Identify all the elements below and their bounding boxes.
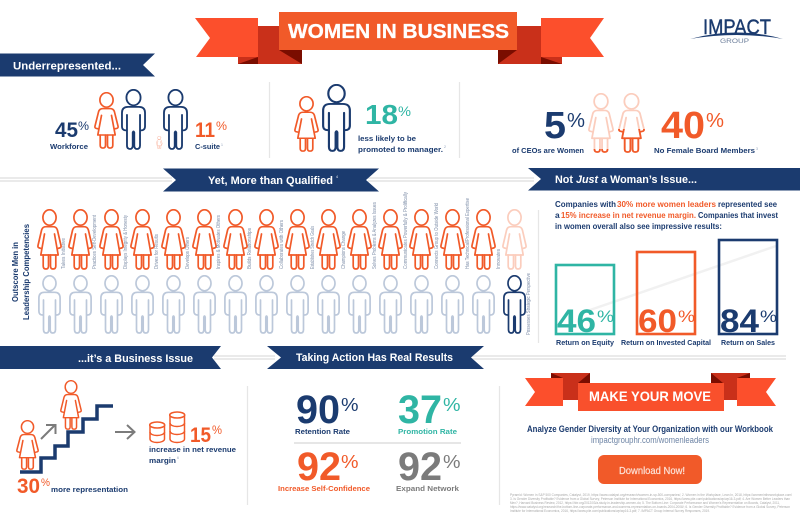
stat: 18% less likely promoted: promoted to manager. [358,145,443,154]
stat: 15% increase in net revenue margin: 15 [190,424,211,447]
text block: companies with more women leaders: 30% more women leaders [617,199,716,209]
banner: it's a Business Issue [0,346,221,369]
icon: woman and man, promotion [295,85,350,151]
competency labels: Communicates Powerfully & Prolifically [403,192,409,269]
chart: stairs with women climbing [17,381,113,472]
competency labels: Takes Initiative [61,238,67,269]
decorative rails [0,178,786,359]
stat: 45% workforce: % [78,119,89,133]
title ribbon: WOMEN IN BUSINESS [288,21,509,43]
row: men icons [39,276,525,333]
banner: Yet, More than Qualified: Yet, More than Qualified [208,175,333,187]
footnotes: Institute for International Economics, 2016, https://www.piie.com/publications/wp/wp16-3.pdf; 7. IMPACT Group Internal Survey Responses, 2019. [510,509,710,513]
arrow: upward [41,425,56,439]
bar: Return on Invested Capital 60% [621,252,711,347]
stat: 92% expand network: % [443,452,460,472]
banner: Not Just a Woman's Issue [528,168,800,190]
bar: Return on Equity 46%: 46 [557,303,596,339]
text block: workbook call to action: impactgrouphr.com/womenleaders [591,435,709,445]
competency labels: Connects Group to Outside World [434,203,440,269]
stat: 5% of CEOs are women [512,105,585,155]
bar: Return on Sales 84%: 84 [720,303,759,339]
competency labels: Establishes Stretch Goals [310,226,316,269]
stat: 18% less likely promoted: less likely to be [358,134,416,143]
competency labels [61,192,532,335]
arrow: right [115,425,134,439]
stat: 92% expand network: Expand Network [396,484,460,493]
row: women icons [38,210,526,269]
text block: companies with more women leaders: in women overall also see impressive results: [555,221,722,231]
competency labels: Inspires & Motivates Others [216,215,222,269]
stat: 92% increase self-confidence [278,445,370,493]
stat: 40% no female board members: % [706,110,724,132]
stat: 5% of CEOs are women: 5 [544,105,566,147]
stat: 45% workforce: 45 [55,119,78,142]
stat: 5% of CEOs are women: % [567,110,585,132]
stat: 37% promotion rate: 37 [398,388,442,432]
banner: Underrepresented [0,54,155,76]
stat: 15% increase in net revenue margin: 6 [177,456,179,460]
competency labels: Builds Relationships [247,228,253,269]
stat: 37% promotion rate: % [443,395,460,415]
stat: 92% increase self-confidence: Increase Self-Confidence [278,484,370,493]
stat: 37% promotion rate [398,388,460,436]
stat: 92% expand network: 92 [398,445,442,489]
stat: 15% increase in net revenue margin [149,423,236,465]
stat: 15% increase in net revenue margin: increase in net revenue [149,445,236,454]
stat: 90% retention rate [295,388,358,436]
bar: Return on Equity 46%: % [597,307,614,326]
stat: 15% increase in net revenue margin: margin [149,456,176,465]
stat: 30% more representation: 30 [17,475,40,498]
stat: 18% less likely promoted: 2 [444,145,446,149]
bar: Return on Sales 84%: Return on Sales [721,340,775,347]
competency labels: Collaborates with Others [279,220,285,269]
icon: two women, CEOs and board members [589,94,644,152]
stat: 37% promotion rate: Promotion Rate [398,427,457,436]
text block: companies with more women leaders: a [555,210,560,220]
stat: 90% retention rate: 90 [296,388,340,432]
stat: 90% retention rate: % [341,395,358,415]
stat: 45% workforce: Workforce [50,142,88,151]
bar: Return on Invested Capital 60%: Return on Invested Capital [621,340,711,347]
axis label: Outscore Men in Leadership Competencies: Outscore Men in [11,242,20,302]
banner: Taking Action Has Real Results: Taking Action Has Real Results [296,352,453,364]
stat: 11% C-suite: 11 [195,119,215,142]
stat: 18% less likely promoted [358,99,446,154]
logo: Impact Group [690,16,783,45]
competency labels: Practices Self-Development [92,214,98,269]
stat: 92% expand network [396,445,460,493]
competency labels: Displays Integrity & Honesty [123,215,129,269]
stat: 18% less likely promoted: % [398,103,411,119]
stat: 30% more representation [17,475,128,498]
competency labels: Innovates [496,249,502,269]
banner: it's a Business Issue: ...it’s a Business Issue [78,353,193,365]
competency labels: Solves Problems & Analyzes Issues [372,202,378,269]
stat: 45% workforce [50,119,89,151]
logo: Impact Group: IMPACT [703,16,771,39]
stat: 40% no female board members: 40 [661,105,705,147]
text block: companies with more women leaders: Companies that invest [698,210,778,220]
stat: 92% increase self-confidence: % [341,452,358,472]
banner: Not Just a Woman's Issue: Not Just a Woman’s Issue... [555,174,697,186]
bar: Return on Invested Capital 60%: 60 [638,303,677,339]
stat: 11% C-suite [195,119,227,151]
text block: companies with more women leaders: Companies with [555,199,616,209]
text block: workbook call to action [527,424,774,445]
bar: Return on Equity 46% [556,265,614,347]
bar: Return on Equity 46%: Return on Equity [556,340,614,347]
stat: 5% of CEOs are women: of CEOs are Women [512,146,584,155]
banner: Yet, More than Qualified: 4 [336,175,338,179]
competency labels: Develops Others [185,237,191,269]
banner: Yet, More than Qualified [163,168,379,192]
ribbon: Make Your Move [525,373,776,411]
competency labels: Has Technical/Professional Expertise [465,198,471,269]
bar: Return on Sales 84%: % [760,307,777,326]
banner: Taking Action Has Real Results [267,346,484,369]
stat: 40% no female board members: 3 [756,147,758,151]
bar: Return on Invested Capital 60%: % [678,307,695,326]
stat: 30% more representation: more representation [51,485,128,494]
stat: 15% increase in net revenue margin: % [212,423,222,437]
axis label: Outscore Men in Leadership Competencies [11,223,31,320]
banner: Underrepresented: Underrepresented... [13,60,121,72]
stat: 40% no female board members: No Female Board Members [654,146,755,155]
stat: 90% retention rate: Retention Rate [295,427,350,436]
text block: companies with more women leaders: 15% increase in net revenue margin. [561,210,696,220]
button: Download Now: Download Now! [619,465,685,477]
stat: 11% C-suite: 1 [221,143,223,147]
icon: man and tiny woman, C-suite [156,90,187,149]
icon: woman and man, workforce [95,90,145,149]
button: Download Now [598,455,702,484]
stat: 11% C-suite: C-suite [195,142,220,151]
icon: coin stacks [150,412,185,442]
bar: Return on Sales 84% [719,240,777,347]
text block: companies with more women leaders: represented see [718,199,777,209]
stat: 11% C-suite: % [216,119,227,133]
stat: 30% more representation: % [41,477,50,489]
bar chart: returns [556,240,777,347]
stat: 92% increase self-confidence: 92 [297,445,341,489]
logo: Impact Group: GROUP [720,38,749,45]
title ribbon [195,12,604,64]
ribbon: Make Your Move: MAKE YOUR MOVE [589,388,711,404]
axis label: Outscore Men in Leadership Competencies: Leadership Competencies [22,223,31,320]
competency labels: Possesses Strategic Perspective [526,273,532,335]
stat: 40% no female board members [654,105,758,155]
competency labels: Champions Change [341,231,347,269]
text block: companies with more women leaders [555,199,778,231]
footnotes [510,493,792,513]
stat: 18% less likely promoted: 18 [365,99,398,130]
competency labels: Drives for Results [154,234,160,269]
